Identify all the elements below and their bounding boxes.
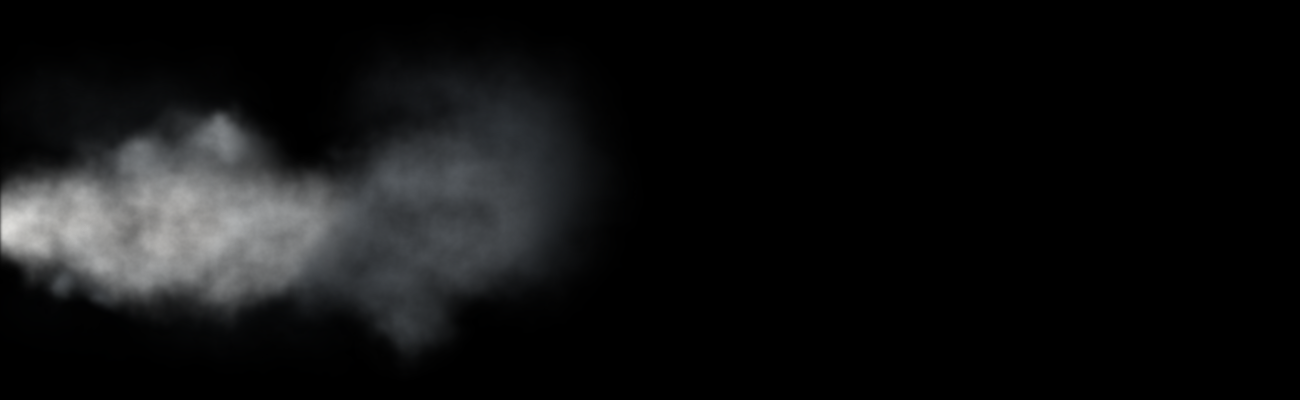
mid-tone grey smoke body [85, 128, 535, 346]
faint outer haze [0, 65, 585, 327]
bright core of the plume [0, 165, 346, 298]
brightest glow at the source [0, 192, 232, 260]
curls under and above the plume [56, 121, 242, 305]
